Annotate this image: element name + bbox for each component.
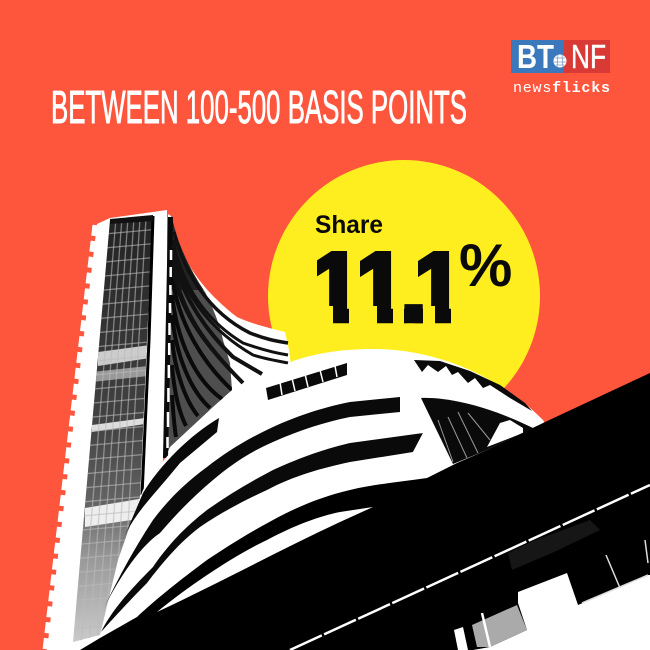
tower window edge shadow [142, 216, 153, 495]
dome dark interior [421, 398, 533, 464]
dome [90, 349, 560, 650]
dome slit [120, 418, 219, 547]
share label: Share [315, 211, 383, 239]
dome stripe A [103, 397, 400, 610]
curved wing [160, 210, 292, 470]
logo NF letters: NF [571, 38, 606, 75]
tower white body [47, 210, 167, 650]
dome stripe B [101, 433, 423, 632]
dark grey facade [508, 520, 600, 570]
yellow circle [268, 160, 540, 432]
logo red panel [564, 40, 610, 73]
BSE tower [45, 210, 170, 650]
logo blue panel [511, 40, 564, 73]
wing column black strip [166, 217, 170, 458]
lower right white facade [473, 573, 650, 650]
share callout [316, 215, 511, 324]
grey panel [472, 605, 527, 647]
wing white rim [168, 214, 292, 470]
logo: BT NF newsflicks [511, 38, 610, 97]
small white strip [454, 627, 468, 650]
newsflicks wordmark: newsflicks [513, 80, 610, 97]
dome upper window band [266, 363, 347, 400]
wing white dashes [168, 250, 171, 448]
white wedge [157, 507, 373, 612]
dome right window band [414, 360, 532, 411]
white mullion [482, 613, 490, 647]
dome white pillar [400, 397, 451, 470]
wing dark fan [168, 220, 232, 452]
wing ribs [172, 232, 288, 383]
percent sign: % [459, 232, 512, 299]
dashed white roof line [290, 485, 650, 650]
window frame lines [582, 540, 648, 603]
building black mass [80, 373, 650, 650]
dome white body [90, 349, 560, 650]
dome interior lines [438, 412, 490, 462]
dome right white blob [487, 420, 523, 447]
tower windows [73, 220, 152, 642]
black foreground building [80, 373, 650, 650]
logo globe icon [554, 54, 566, 68]
share value: 11.1 [308, 232, 465, 342]
logo BT letters: BT [517, 38, 554, 75]
